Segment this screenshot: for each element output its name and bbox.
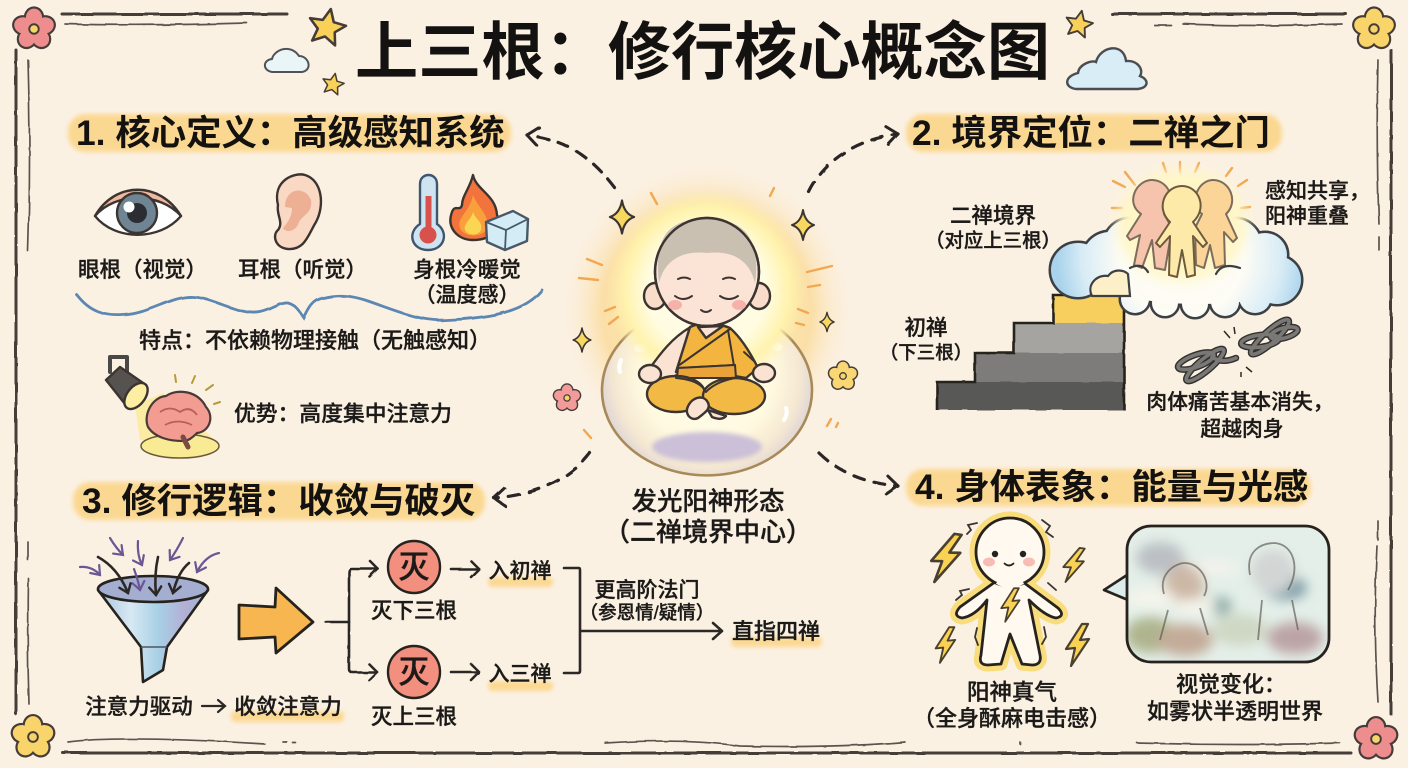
lightning bolts (928, 531, 1089, 666)
title: 上三根：修行核心概念图 (355, 18, 1050, 88)
result: third dhyana: 入三禅 (488, 663, 552, 686)
central caption (604, 488, 812, 547)
figures overlapped (1127, 180, 1237, 277)
realm labels: 初禅 (904, 316, 948, 340)
corner flower: top left (12, 9, 56, 50)
head halo (607, 190, 807, 390)
branch lines (326, 561, 479, 680)
heading 1: 1. 核心定义：高级感知系统 (76, 113, 505, 153)
decoration: cloud right (1067, 48, 1147, 89)
result: first dhyana: 入初禅 (488, 560, 552, 583)
icon: broken chain (1176, 316, 1299, 385)
icon: spotlight on brain (106, 357, 220, 458)
realm labels: （对应上三根） (925, 230, 1061, 252)
icon: flame (450, 175, 498, 240)
cloud with figures (1051, 162, 1301, 317)
sense labels: 耳根（听觉） (238, 258, 367, 282)
crystal bubble (602, 305, 812, 475)
sense labels: （温度感） (414, 284, 520, 307)
result: fourth dhyana: 直指四禅 (732, 619, 820, 644)
sense labels: 眼根（视觉） (78, 258, 207, 282)
staircase (937, 295, 1124, 410)
heading 4: 4. 身体表象：能量与光感 (915, 467, 1308, 507)
central figure: glowing monk (553, 160, 858, 547)
glowing rays (1112, 162, 1250, 208)
extinguish node: lower roots: 灭 (398, 550, 430, 585)
stair overlap puff (1090, 270, 1130, 296)
central caption: 发光阳神形态 (631, 488, 785, 516)
panel: 1 core definition (68, 113, 542, 458)
big block arrow (239, 588, 313, 653)
central caption: （二禅境界中心） (604, 517, 812, 547)
figure caption (913, 680, 1111, 731)
icon: funnel with arrows (80, 538, 219, 682)
speech bubble: hazy world (1104, 526, 1329, 662)
heading 3: 3. 修行逻辑：收敛与破灭 (82, 481, 475, 521)
pain text: 超越肉身 (1200, 418, 1284, 441)
small flower pink (553, 385, 581, 412)
front cloud puffs (1130, 266, 1240, 274)
higher method text: （参恩情/疑情） (580, 602, 714, 623)
monk head (644, 218, 770, 326)
panel: 4 body signs (906, 467, 1329, 731)
pain text: 肉体痛苦基本消失， (1146, 391, 1334, 414)
dashed arrows from centre (494, 134, 898, 498)
figure caption: （全身酥麻电击感） (913, 706, 1111, 731)
monk robe and legs (639, 323, 775, 419)
figure caption: 阳神真气 (967, 680, 1057, 705)
outer glow (557, 160, 857, 460)
higher method text: 更高阶法门 (594, 579, 700, 602)
realm labels (880, 204, 1061, 363)
realm labels: 二禅境界 (950, 204, 1036, 228)
corner flower: bottom left (11, 716, 55, 759)
corner flower: top right (1352, 9, 1396, 50)
extinguish node: lower roots: 灭下三根 (371, 599, 457, 623)
higher method text (580, 579, 714, 623)
heading 2: 2. 境界定位：二禅之门 (912, 113, 1270, 153)
sparkles (573, 200, 834, 352)
extinguish node: upper roots (371, 646, 457, 729)
panel: 3 practice logic (73, 481, 822, 729)
vision caption (1147, 672, 1323, 724)
attention caption: 注意力驱动 (85, 695, 193, 719)
small flower yellow (828, 362, 858, 391)
extinguish node: upper roots: 灭 (398, 655, 430, 690)
decoration: small cloud left (265, 49, 309, 72)
trait text: 特点：不依赖物理接触（无触感知） (139, 328, 491, 353)
extinguish node: upper roots: 灭上三根 (371, 705, 457, 729)
light rays (579, 188, 838, 438)
icon: eye (95, 190, 181, 235)
corner flower: bottom right (1354, 718, 1398, 761)
vision caption: 如雾状半透明世界 (1147, 699, 1323, 724)
shared perception text: 阳神重叠 (1265, 205, 1349, 228)
merge bracket and arrow (564, 568, 722, 673)
decoration: stars (306, 5, 1095, 96)
vision caption: 视觉变化： (1176, 672, 1286, 697)
icon: ear (275, 174, 321, 249)
attention caption (85, 695, 344, 722)
shared perception text: 感知共享， (1265, 180, 1370, 203)
sense labels: 身根冷暖觉 (413, 258, 521, 282)
brace (77, 290, 542, 320)
advantage text: 优势：高度集中注意力 (234, 401, 452, 426)
attention caption: 收敛注意力 (234, 695, 342, 719)
pain text (1146, 391, 1334, 441)
extinguish node: lower roots (371, 541, 457, 623)
glowing figure (956, 518, 1062, 665)
icon: thermometer (412, 175, 444, 250)
realm labels: （下三根） (880, 342, 972, 363)
shared perception text (1265, 180, 1370, 228)
sense labels (78, 258, 521, 307)
icon: ice cube (486, 211, 528, 250)
panel: 2 realm position (880, 113, 1370, 441)
